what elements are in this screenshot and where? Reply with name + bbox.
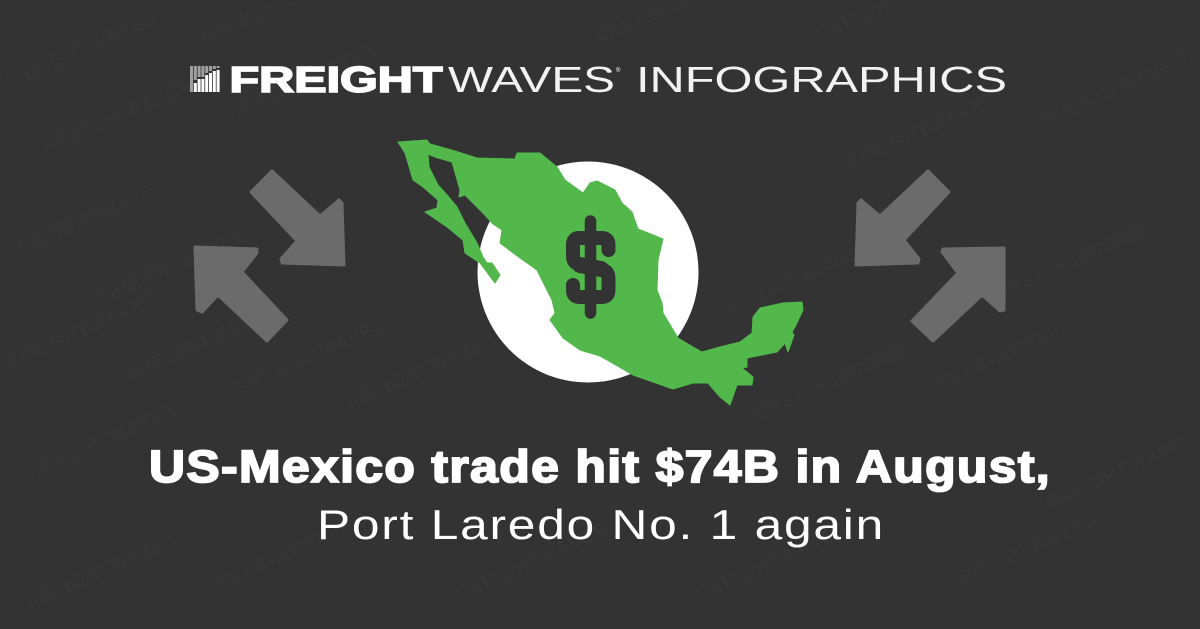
- infographic canvas: FREIGHTWAVES: [13, 174, 171, 260]
- icon: FreightWaves bars: [190, 66, 220, 92]
- logo wordmark INFOGRAPHICS: INFOGRAPHICS: [636, 59, 1007, 100]
- map: Mexico: [398, 140, 803, 405]
- infographic canvas: FREIGHTWAVES: [1033, 49, 1191, 135]
- infographic canvas: FREIGHTWAVES: [1043, 429, 1200, 515]
- white circle behind map: [478, 162, 698, 382]
- title: [149, 441, 1051, 548]
- infographic canvas: FREIGHTWAVES: [38, 74, 196, 160]
- infographic canvas: FREIGHTWAVES: [933, 309, 1091, 395]
- infographic canvas: FREIGHTWAVES: [93, 224, 251, 310]
- logo wordmark FREIGHT: FREIGHT: [230, 59, 443, 100]
- infographic canvas: FREIGHTWAVES: [23, 399, 181, 485]
- headline: US-Mexico trade hit $74B in August,: [149, 441, 1051, 492]
- infographic canvas: FREIGHTWAVES: [753, 339, 911, 425]
- infographic canvas: FREIGHTWAVES: [943, 509, 1101, 595]
- subheadline: Port Laredo No. 1 again: [317, 501, 885, 548]
- logo: FreightWaves Infographics: [190, 59, 1007, 100]
- registered mark: ®: [616, 67, 621, 74]
- icon: left exchange arrows: [195, 171, 344, 341]
- infographic canvas: FREIGHTWAVES: [993, 219, 1151, 305]
- infographic canvas: FREIGHTWAVES: [123, 299, 281, 385]
- infographic canvas: FREIGHTWAVES: [343, 329, 501, 415]
- icon: dollar sign: [573, 221, 608, 313]
- infographic canvas: FREIGHTWAVES: [23, 529, 181, 615]
- infographic canvas: FREIGHTWAVES: [3, 7, 161, 93]
- icon: right exchange arrows: [856, 171, 1004, 341]
- infographic canvas: FREIGHTWAVES: [233, 314, 391, 400]
- infographic canvas: FREIGHTWAVES: [223, 39, 381, 125]
- infographic canvas: FREIGHTWAVES: [843, 89, 1001, 175]
- infographic canvas: FREIGHTWAVES: [213, 509, 371, 595]
- infographic canvas: FREIGHTWAVES: [693, 519, 851, 605]
- infographic canvas: FREIGHTWAVES: [3, 289, 161, 375]
- infographic canvas: FREIGHTWAVES: [713, 239, 871, 325]
- infographic canvas: FREIGHTWAVES: [453, 519, 611, 605]
- logo wordmark WAVES: WAVES: [448, 59, 615, 100]
